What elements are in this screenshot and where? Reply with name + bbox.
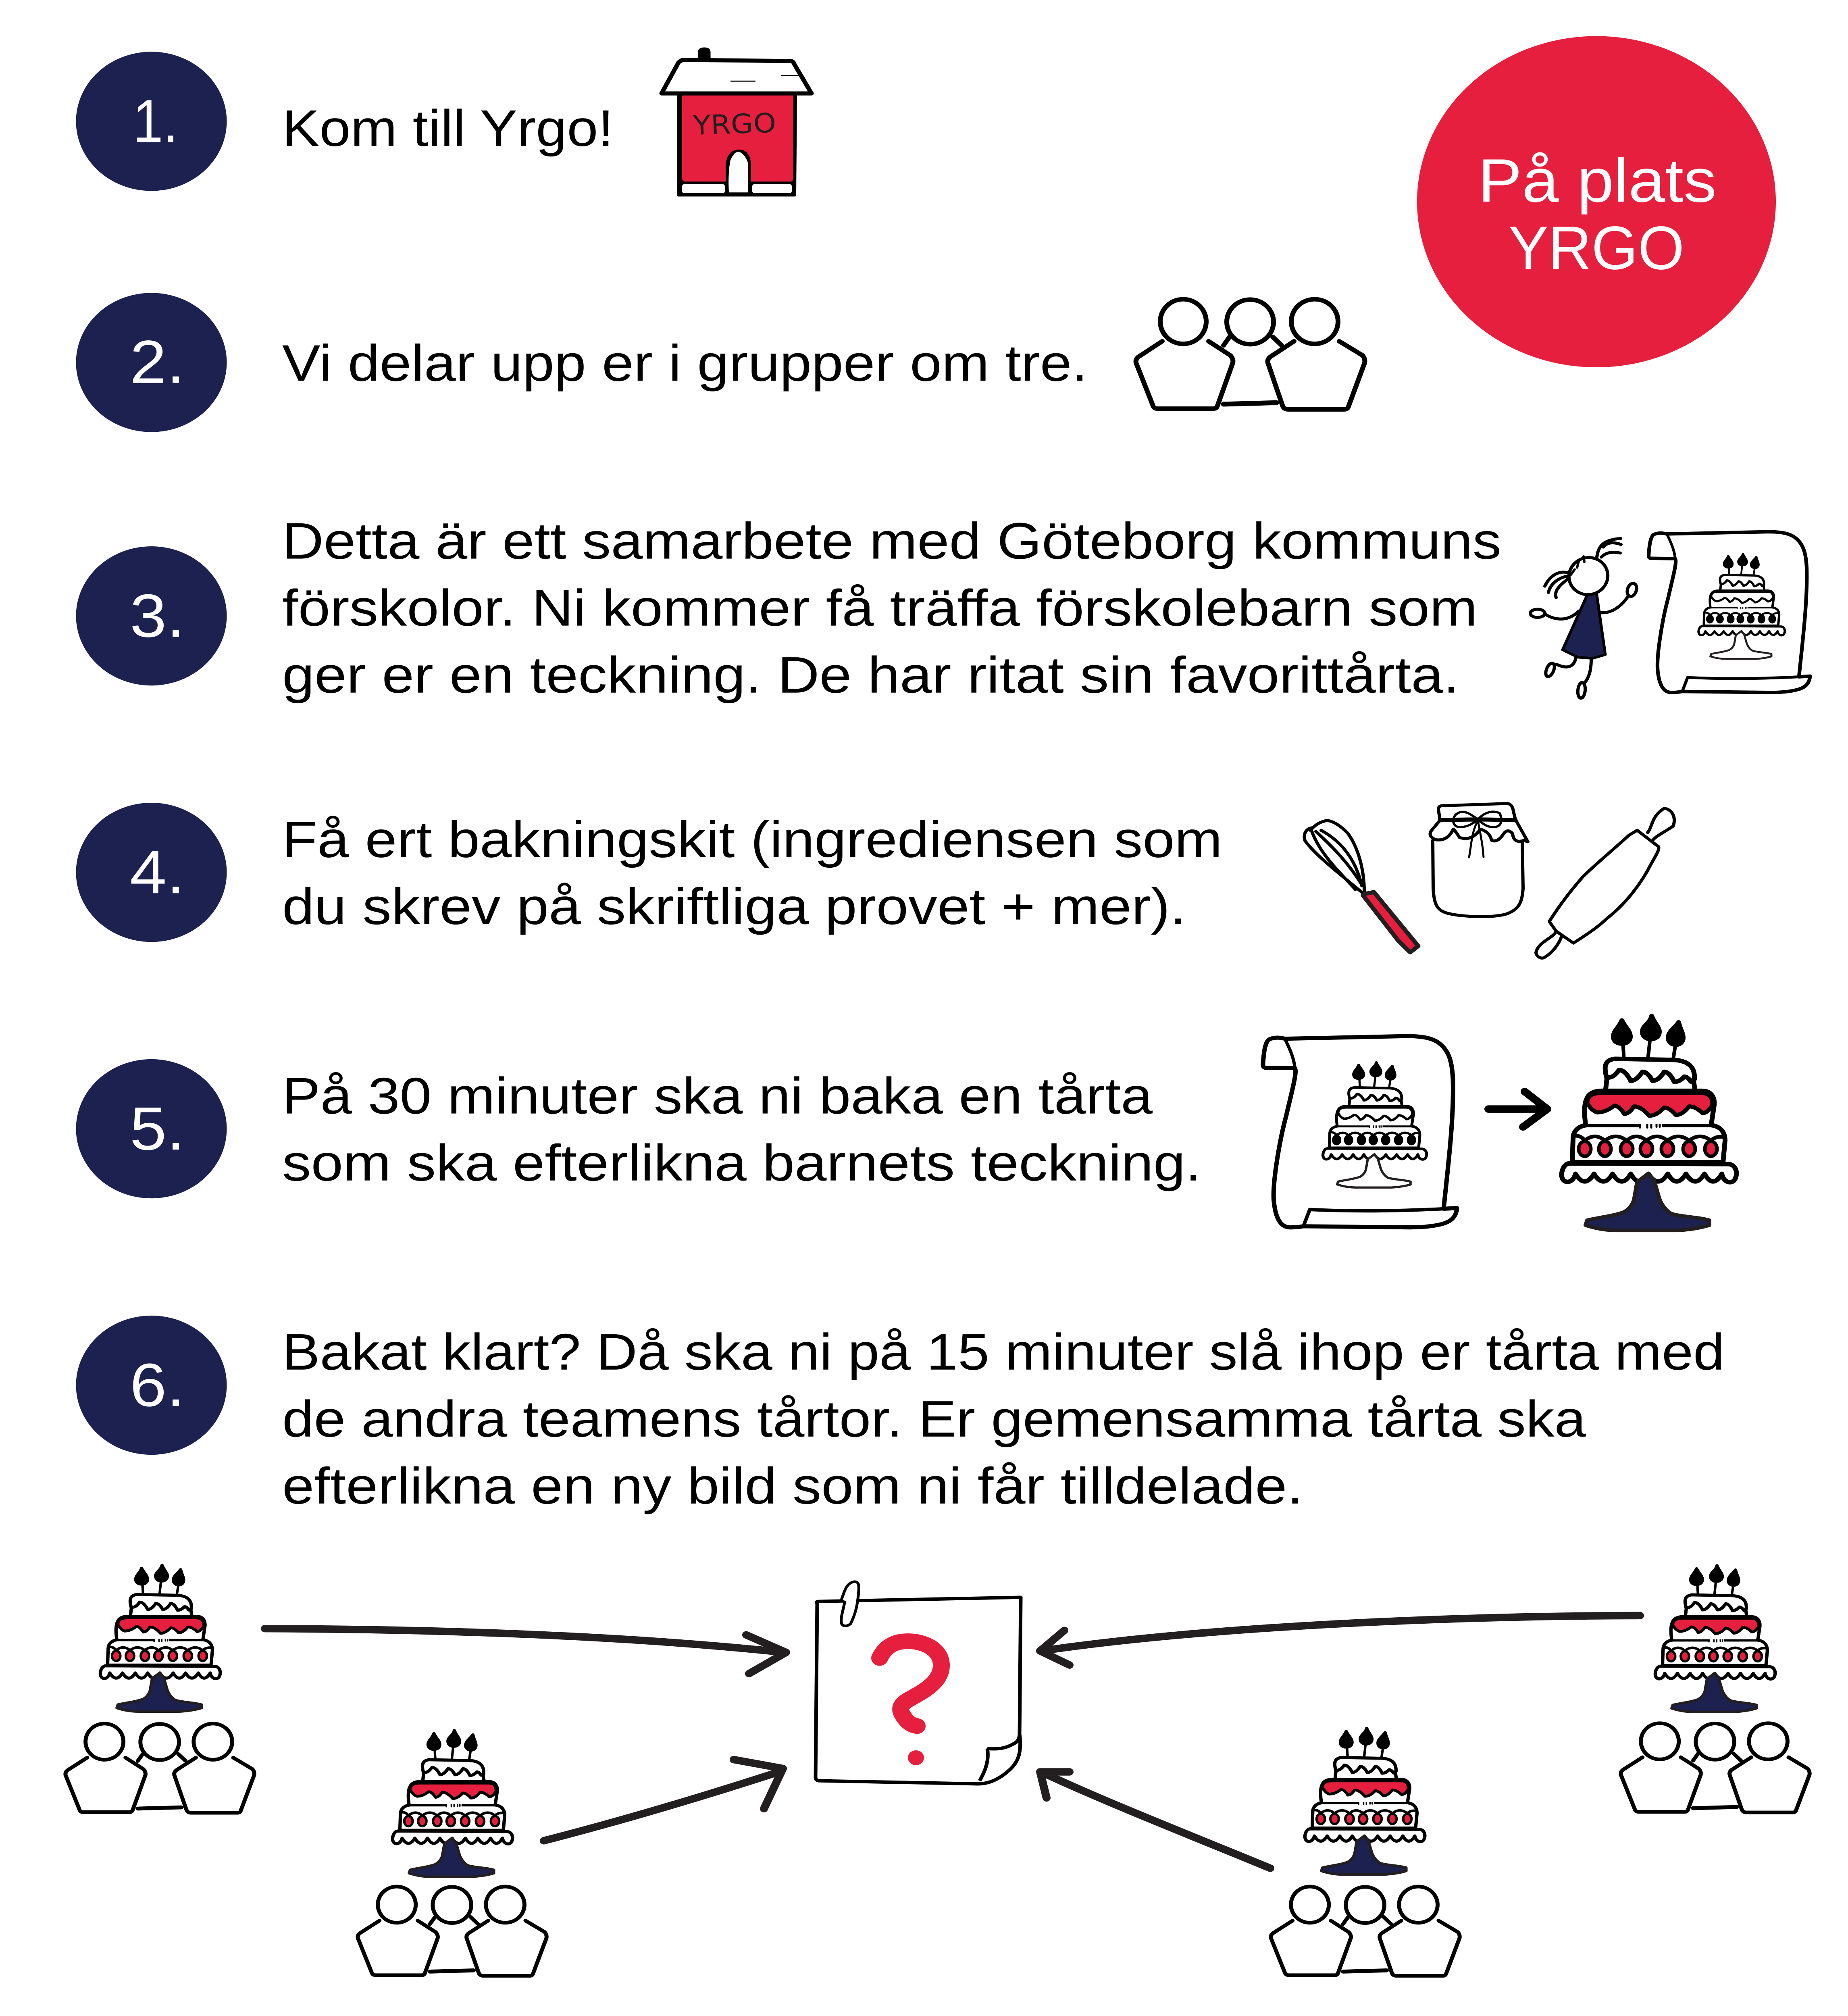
step 4 text: [282, 811, 1222, 935]
badge: På plats YRGO: På plats: [1478, 146, 1717, 215]
step 3 text: [282, 512, 1501, 704]
icon: coloured cake: [1562, 1016, 1736, 1231]
badge: På plats YRGO: [1417, 36, 1776, 367]
number badge 2: 2.: [130, 328, 185, 396]
step 6 text: Bakat klart? Då ska ni på 15 minuter slå ihop er tårta med: [282, 1324, 1725, 1381]
step 2 text: Vi delar upp er i grupper om tre.: [282, 335, 1088, 392]
number badge 1: [76, 52, 227, 191]
badge: På plats YRGO: YRGO: [1509, 213, 1684, 282]
step 5 text: som ska efterlikna barnets teckning.: [282, 1135, 1201, 1192]
number badge 3: [76, 546, 227, 685]
number badge 2: [76, 293, 227, 432]
step 6: [76, 1316, 1725, 1515]
team 2: cake and people: [358, 1731, 547, 1976]
step 5 text: På 30 minuter ska ni baka en tårta: [282, 1068, 1153, 1125]
step 6 text: efterlikna en ny bild som ni får tilldelade.: [282, 1458, 1303, 1515]
step 6 text: de andra teamens tårtor. Er gemensamma tårta ska: [282, 1391, 1586, 1448]
icon: scroll with cake drawing: [1649, 532, 1810, 692]
step 3 text: Detta är ett samarbete med Göteborg kommuns: [282, 512, 1501, 570]
step 3: [76, 512, 1810, 704]
step 2: [76, 293, 1365, 432]
number badge 6: [76, 1316, 227, 1455]
icon: rolling pin: [1536, 808, 1674, 958]
arrow: team 2 to note: [544, 1760, 783, 1841]
step 3 text: ger er en teckning. De har ritat sin favorittårta.: [282, 647, 1459, 704]
step 5: [76, 1016, 1736, 1231]
icon: scroll with cake drawing: [1263, 1036, 1457, 1227]
icon: group of three people: [1136, 299, 1365, 409]
step 4 text: du skrev på skriftliga provet + mer).: [282, 878, 1186, 935]
step 6 text: [282, 1324, 1725, 1515]
icon: whisk: [1305, 821, 1418, 952]
number badge 6: 6.: [130, 1351, 185, 1419]
icon: jar with cloth and bow: [1430, 804, 1528, 916]
team 4: cake and people: [1621, 1566, 1810, 1812]
team 3: cake and people: [1271, 1729, 1460, 1976]
team 1: cake and people: [65, 1565, 254, 1813]
curled corner: [980, 1734, 1020, 1781]
step 1 text: Kom till Yrgo!: [282, 100, 614, 157]
paperclip: [841, 1582, 859, 1626]
note with question mark: [816, 1582, 1021, 1784]
icon: red YRGO house: [662, 48, 812, 196]
step 1: [76, 48, 812, 196]
number badge 4: 4.: [130, 838, 185, 906]
step 3 text: förskolor. Ni kommer få träffa förskolebarn som: [282, 579, 1478, 637]
arrow: [1488, 1091, 1547, 1127]
arrow: team 4 to note: [1040, 1616, 1640, 1665]
arrow: team 3 to note: [1040, 1772, 1270, 1868]
number badge 1: 1.: [133, 87, 178, 155]
number badge 4: [76, 803, 227, 942]
number badge 3: 3.: [130, 582, 185, 650]
step 5 text: [282, 1068, 1201, 1192]
icon: red YRGO house: YRGO: [692, 108, 776, 141]
number badge 5: [76, 1059, 227, 1198]
step 4: [76, 803, 1674, 958]
arrow: team 1 to note: [265, 1629, 786, 1674]
icon: girl in blue dress: [1530, 539, 1638, 698]
step 4 text: Få ert bakningskit (ingrediensen som: [282, 811, 1222, 868]
paper: [816, 1597, 1021, 1784]
number badge 5: 5.: [130, 1095, 185, 1163]
question mark: [880, 1641, 941, 1765]
